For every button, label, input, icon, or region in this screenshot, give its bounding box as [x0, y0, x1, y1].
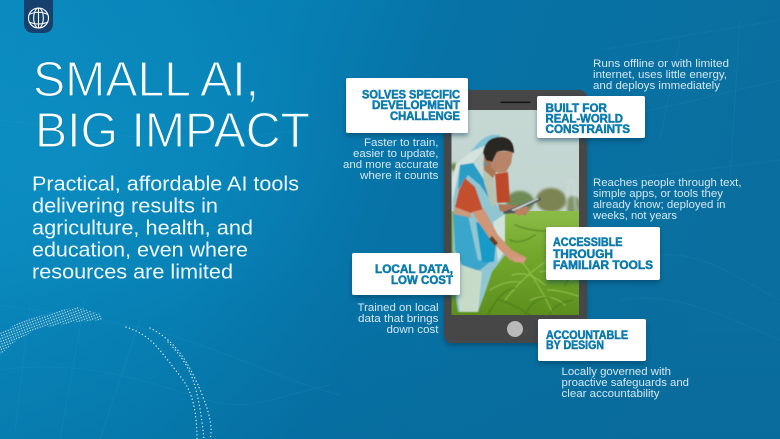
card: accountable by design [538, 319, 646, 361]
card: solves specific development challenge: SOLVES SPECIFIC [362, 88, 461, 101]
card: local data, low cost: LOCAL DATA, [375, 263, 453, 276]
text: solves specific description: and more accurate [343, 159, 438, 171]
text: solves specific description: easier to update, [353, 148, 438, 160]
card: accountable by design: BY DESIGN [546, 339, 604, 352]
photo: farmer with tablet in field [450, 110, 581, 315]
text: solves specific description: Faster to train, [364, 137, 438, 149]
subtitle: delivering results in [32, 195, 218, 218]
speaker [500, 102, 530, 103]
card: built for real-world constraints: BUILT FOR [546, 102, 608, 115]
card: accessible through familiar tools: ACCESSIBLE [553, 236, 623, 249]
logo tab [24, 0, 53, 33]
text: accessible description [592, 177, 742, 222]
neck [484, 155, 497, 178]
fingers [512, 256, 526, 263]
title: SMALL AI, [33, 52, 259, 107]
title [33, 52, 310, 158]
grass blades [488, 225, 579, 315]
hair [483, 137, 514, 162]
card: built for real-world constraints: REAL-WORLD [546, 112, 623, 126]
text: built for real-world description: and deploys immediately [593, 80, 721, 92]
text: accessible description: already know; deployed in [593, 199, 726, 211]
text: accessible description: weeks, not years [592, 210, 678, 222]
text: accountable description: Locally governed with [562, 366, 671, 378]
midriff [454, 205, 472, 218]
blouse left [455, 178, 483, 213]
card: solves specific development challenge: CHALLENGE [390, 110, 460, 123]
veil [452, 146, 486, 198]
text: local data description: down cost [386, 324, 438, 336]
text: built for real-world description: internet, uses little energy, [593, 69, 727, 81]
card: local data, low cost: LOW COST [391, 274, 453, 287]
card: accessible through familiar tools: THROUGH [553, 248, 613, 261]
text: built for real-world description [593, 58, 729, 92]
card: local data, low cost [352, 253, 460, 295]
hand on tablet [514, 206, 529, 216]
pale sari strip [493, 214, 505, 262]
arm reaching to grass [472, 209, 527, 263]
text: accessible description: simple apps, or tools they [593, 188, 724, 200]
sari main [453, 163, 505, 312]
card: accessible through familiar tools [546, 227, 660, 280]
text: local data description [358, 302, 439, 336]
subtitle [32, 173, 299, 284]
earring [484, 162, 486, 166]
phone [444, 90, 587, 343]
subtitle: Practical, affordable AI tools [32, 173, 299, 196]
card: accountable by design: ACCOUNTABLE [546, 329, 628, 342]
text: accessible description: Reaches people through text, [593, 177, 742, 189]
card: solves specific development challenge: DEVELOPMENT [372, 99, 460, 112]
home button [507, 321, 523, 337]
text: solves specific description: where it counts [359, 170, 439, 182]
card: solves specific development challenge [346, 78, 468, 133]
text: built for real-world description: Runs offline or with limited [593, 58, 729, 70]
text: local data description: data that brings [358, 313, 439, 325]
subtitle: resources are limited [32, 261, 233, 284]
subtitle: education, even where [32, 239, 248, 262]
text: local data description: Trained on local [358, 302, 438, 314]
text: accountable description: proactive safeguards and [562, 377, 689, 389]
card: accessible through familiar tools: FAMILIAR TOOLS [553, 259, 653, 272]
title: BIG IMPACT [35, 103, 310, 158]
dotted arc decoration [0, 307, 211, 439]
card: built for real-world constraints [537, 96, 645, 138]
text: accountable description: clear accountability [562, 388, 660, 400]
subtitle: agriculture, health, and [32, 217, 253, 240]
text: accountable description [562, 366, 689, 400]
chest [482, 160, 497, 208]
text: solves specific description [343, 137, 439, 182]
tablet [503, 197, 541, 214]
forearm holding tablet [498, 204, 528, 215]
face [490, 151, 513, 173]
blouse right [495, 172, 510, 203]
card: built for real-world constraints: CONSTRAINTS [546, 123, 630, 136]
